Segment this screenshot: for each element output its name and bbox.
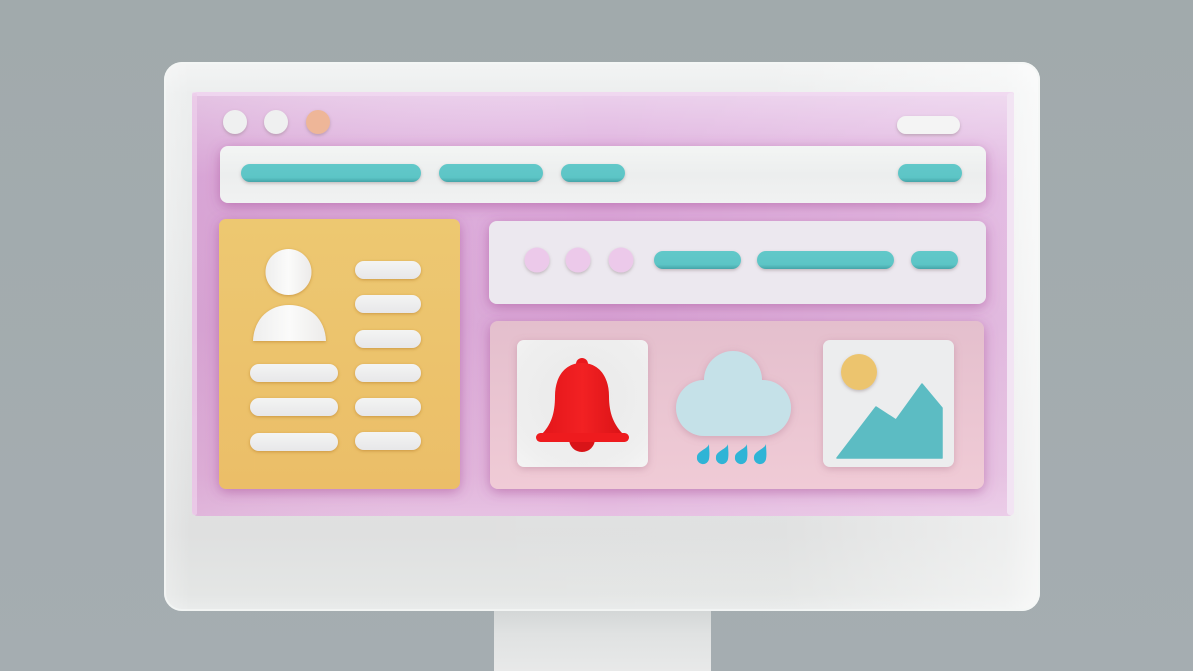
media panel [490,321,984,489]
profile detail lines [250,261,421,451]
toolbar items [654,251,958,269]
window control dots [223,110,330,134]
monitor body [164,62,1040,611]
mountains [837,384,942,458]
navigation bar [220,146,986,203]
icon: notification bell [517,340,648,467]
small white pill top right [897,116,960,134]
sun [841,354,877,390]
panel: pink browser window [192,92,1014,516]
raindrops [697,444,766,464]
icon: image placeholder [823,340,954,467]
toolbar dots [524,248,634,272]
icon: rain cloud [676,351,791,464]
profile card [219,219,460,489]
secondary toolbar [489,221,986,304]
icon: user avatar [253,249,326,341]
navigation items [241,164,962,182]
monitor stand [494,610,711,671]
